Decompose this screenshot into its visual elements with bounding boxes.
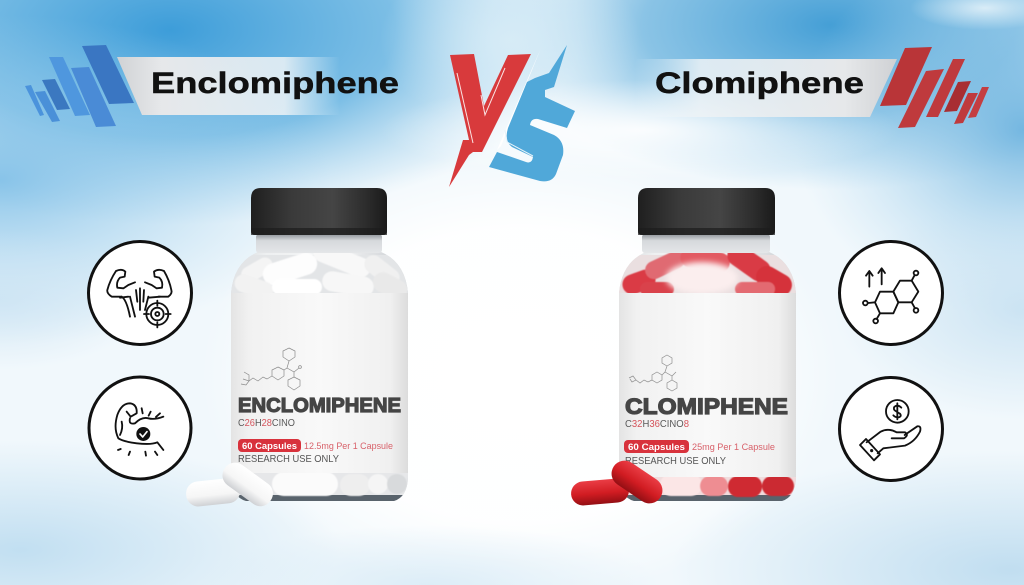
heading: Clomiphene: Clomiphene [655,67,864,100]
dosage: 12.5mg Per 1 Capsule [304,441,393,452]
badge text: 60 Capsules [242,441,297,452]
left header: Enclomiphene [25,45,399,127]
neck [642,234,770,253]
glass body [619,252,796,501]
neck [256,234,382,253]
product name: ENCLOMIPHENE [238,395,401,417]
label [619,293,796,477]
icon: hand holding dollar coin [840,378,942,480]
glass body [231,252,408,501]
icon: molecule with up arrows [840,242,942,344]
letter V [449,54,531,187]
letter S [489,45,575,181]
right bottle: Clomiphene [570,188,796,508]
banner: Clomiphene [635,59,897,117]
blue bar graphic [25,45,134,127]
VS logo [449,45,575,187]
dosage: 25mg Per 1 Capsule [692,442,775,453]
molecule diagram [629,355,677,391]
loose white capsules [185,458,278,511]
research note: RESEARCH USE ONLY [238,453,339,465]
capsule badge [624,440,689,453]
loose red capsules [570,456,667,508]
left bottle: Enclomiphene [185,188,411,511]
molecule diagram [241,348,301,390]
streak [497,48,541,150]
right header: Clomiphene [635,47,989,128]
icon: muscular back with target [88,242,192,344]
label [231,293,408,473]
research note: RESEARCH USE ONLY [625,455,726,467]
chemical formula: C32H36CINO8 [625,418,689,430]
cap [638,188,775,235]
white capsules inside [231,239,411,503]
badge text: 60 Capsules [628,442,685,453]
chemical formula: C26H28CINO [238,417,295,429]
red capsules inside [619,240,796,503]
banner: Enclomiphene [117,57,340,115]
red bar graphic [880,47,989,128]
icon: flexed arm with check [89,377,191,479]
cap [251,188,387,235]
heading: Enclomiphene: Enclomiphene [151,67,399,100]
product name: CLOMIPHENE [625,394,788,419]
capsule badge [238,439,301,452]
